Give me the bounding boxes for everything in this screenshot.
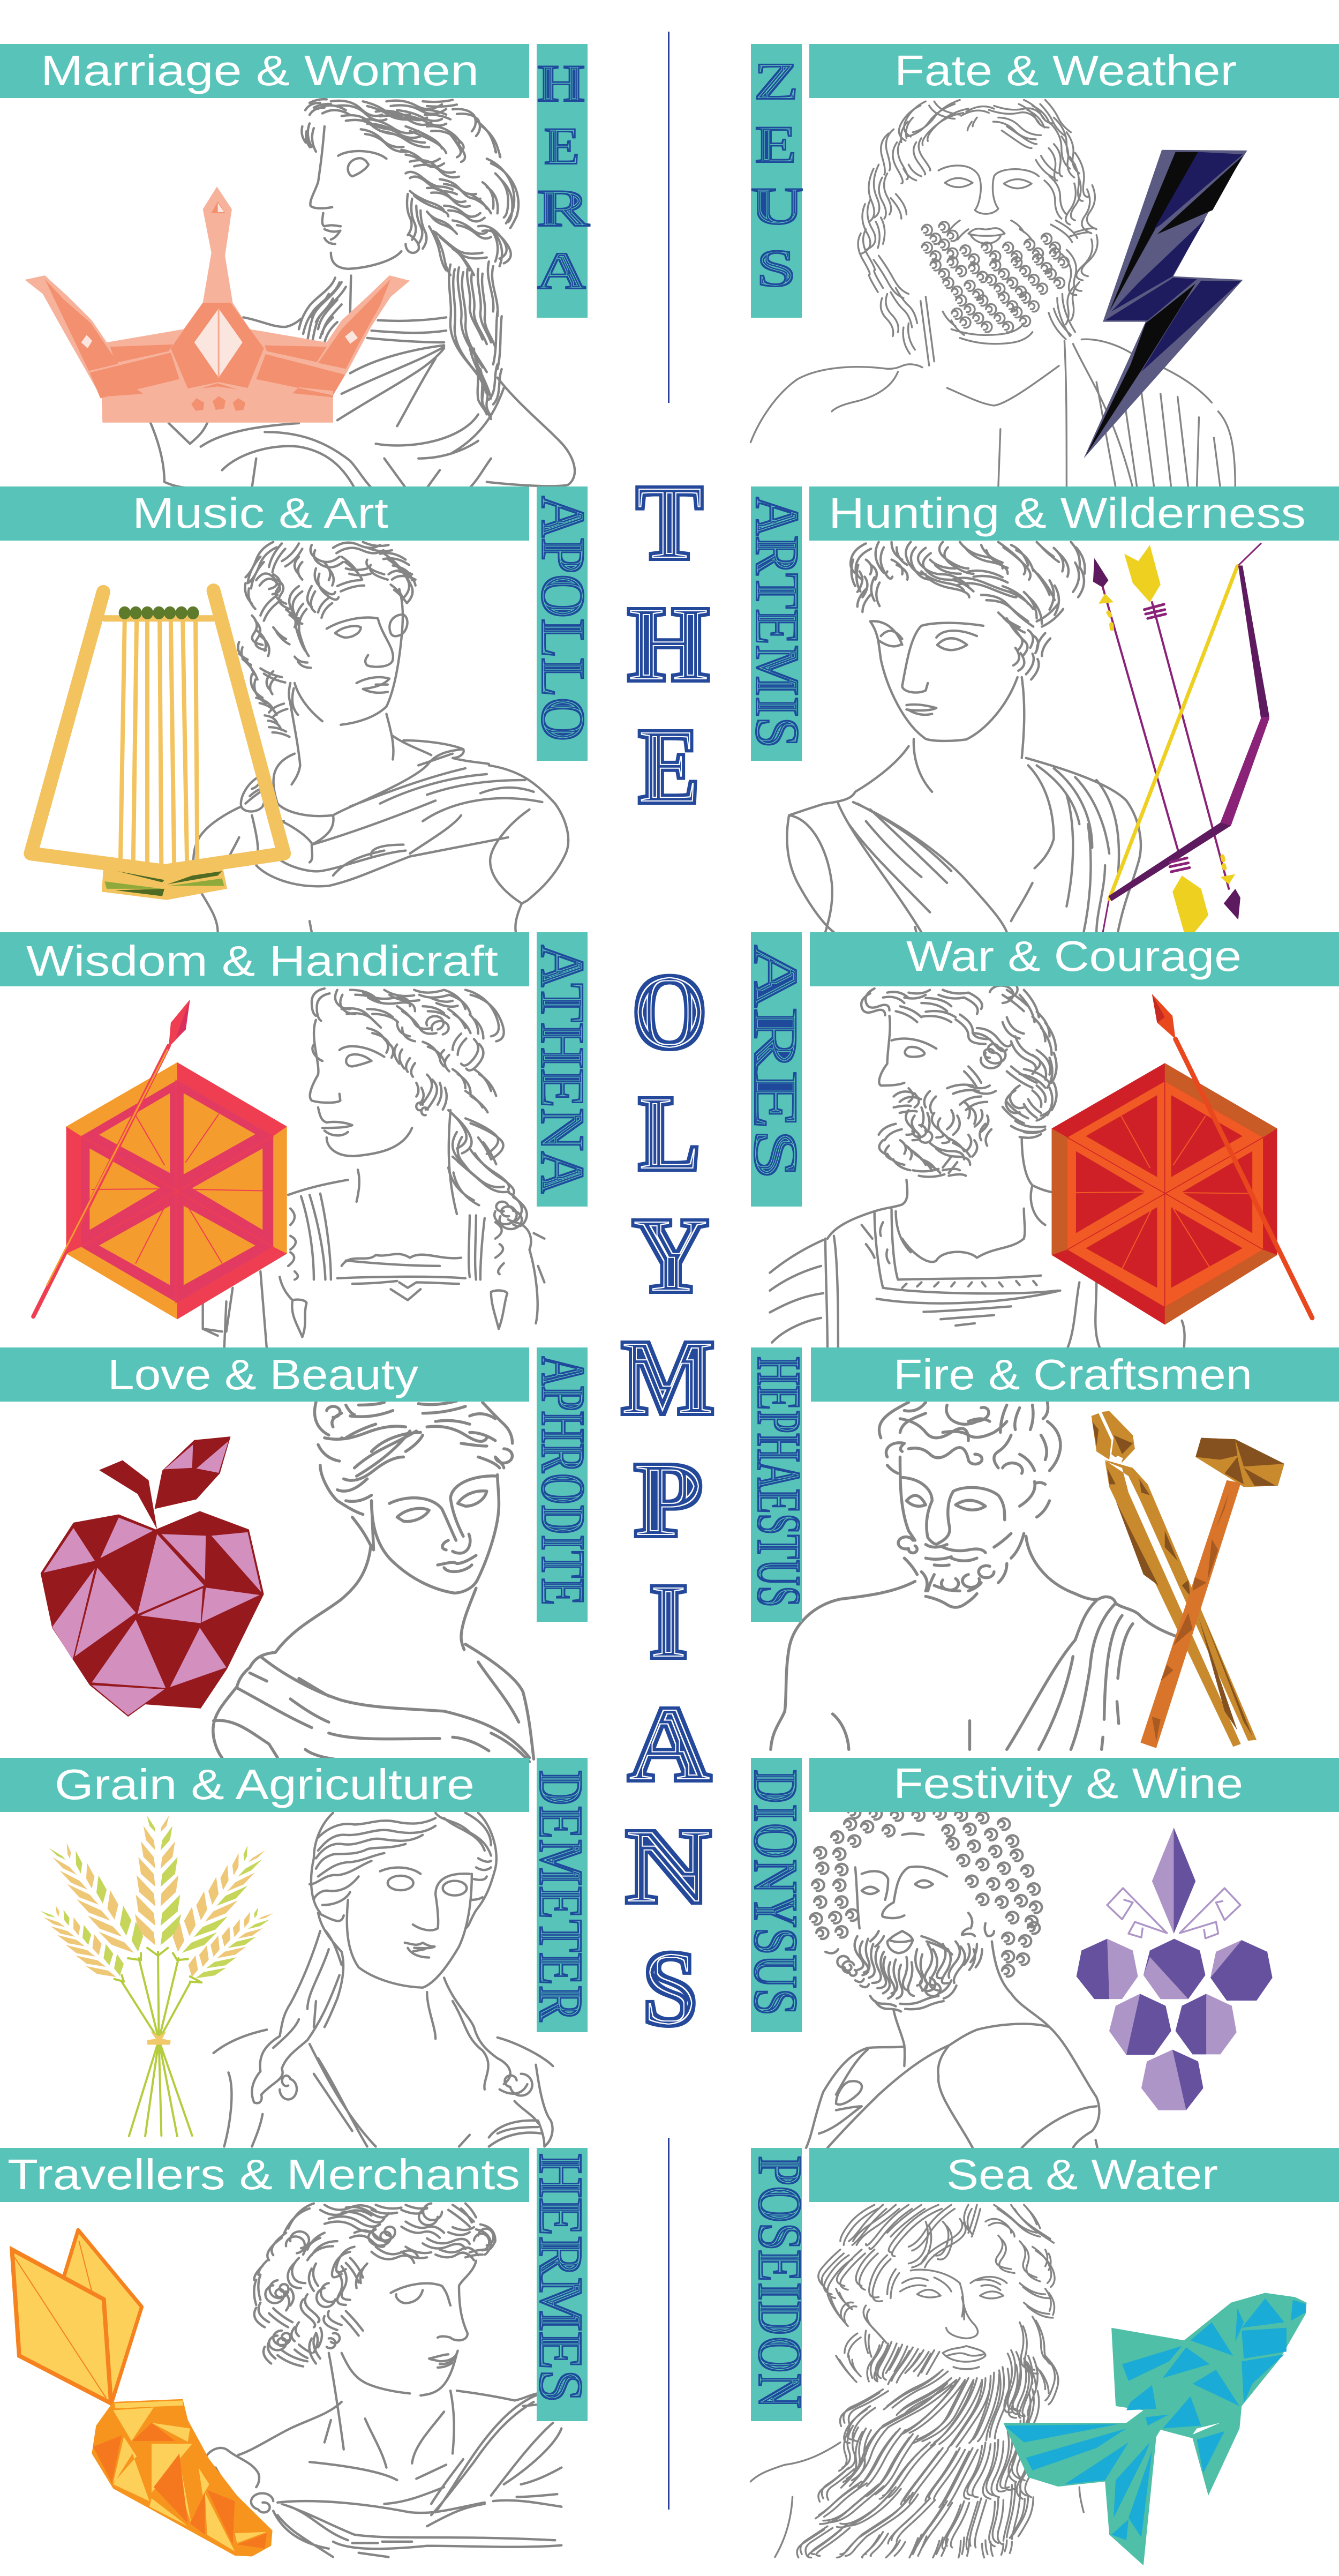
icon: winged sandal xyxy=(12,2229,273,2557)
Poseidon shoulders xyxy=(750,2443,1084,2557)
name: APHRODITE: APHRODITE xyxy=(528,1356,598,1606)
name box: Demeter xyxy=(537,1758,588,2032)
name: POSEIDON: POSEIDON xyxy=(745,2156,815,2408)
icon: wheat sheaf xyxy=(32,1815,281,2136)
icon: tongs and hammer xyxy=(1092,1411,1284,1748)
Athena hair xyxy=(312,989,527,1229)
name: ZEUS: Z xyxy=(754,51,799,111)
name box: Hermes xyxy=(537,2148,588,2421)
Artemis hair xyxy=(851,542,1085,679)
topic text: Fire & Craftsmen xyxy=(893,1351,1252,1398)
panel: Poseidon xyxy=(745,2148,1339,2565)
Apollo face xyxy=(295,589,408,725)
name box: Hera xyxy=(537,44,588,318)
Poseidon beard xyxy=(797,2342,1039,2558)
panel: Demeter xyxy=(0,1758,596,2146)
title: THE OLYMPIANS: Y xyxy=(632,1196,709,1315)
Artemis dress xyxy=(787,677,1141,932)
Hera face xyxy=(310,126,419,269)
bust: Hephaestus xyxy=(771,1402,1176,1749)
topic bar: War & Courage xyxy=(810,932,1339,986)
Dionysus torso xyxy=(806,1942,1099,2148)
bust: Aphrodite xyxy=(213,1401,533,1762)
topic bar: Wisdom & Handicraft xyxy=(0,932,529,986)
title: THE OLYMPIANS: N xyxy=(626,1807,711,1926)
topic bar: Fate & Weather xyxy=(809,44,1339,98)
name box: Hephaestus xyxy=(751,1347,802,1622)
topic bar: Music & Art xyxy=(0,486,529,541)
topic bar: Travellers & Merchants xyxy=(0,2148,529,2202)
Aphrodite hair xyxy=(314,1401,513,1550)
line: top divider xyxy=(668,32,670,403)
topic bar: Festivity & Wine xyxy=(809,1758,1339,1812)
name: HERA: R xyxy=(537,178,590,238)
Athena face xyxy=(310,1020,412,1156)
panel: Apollo xyxy=(0,486,598,932)
Ares hair xyxy=(861,980,1057,1138)
panel: Hera xyxy=(0,44,590,488)
name: DIONYSUS: DIONYSUS xyxy=(741,1770,811,2015)
Hephaestus face xyxy=(900,1457,1005,1544)
icon: lyre xyxy=(31,590,284,900)
bust: Hermes xyxy=(205,2204,561,2557)
title: THE OLYMPIANS: E xyxy=(638,707,699,826)
title: THE OLYMPIANS: M xyxy=(621,1319,714,1437)
name box: Athena xyxy=(537,932,588,1207)
title: THE OLYMPIANS: O xyxy=(632,953,707,1071)
icon: lightning bolt xyxy=(1084,150,1247,459)
icon: shield and spear xyxy=(33,999,287,1319)
topic text: Wisdom & Handicraft xyxy=(26,937,498,985)
title: THE OLYMPIANS: P xyxy=(634,1441,703,1559)
icon: grapes xyxy=(1077,1828,1273,2110)
icon: crown xyxy=(25,186,410,423)
Hera hair xyxy=(299,99,518,419)
title: THE OLYMPIANS: L xyxy=(638,1074,700,1193)
Hephaestus hair xyxy=(879,1402,1060,1517)
Hermes face xyxy=(342,2261,476,2395)
topic text: Travellers & Merchants xyxy=(7,2151,520,2198)
name: ZEUS: U xyxy=(750,176,804,236)
Dionysus beard xyxy=(837,1931,982,2011)
panel: Ares xyxy=(741,932,1339,1350)
name: HERA xyxy=(537,54,590,301)
title: THE OLYMPIANS: I xyxy=(649,1562,688,1681)
topic text: Grain & Agriculture xyxy=(55,1761,475,1808)
Zeus face xyxy=(938,166,1039,244)
panel: Aphrodite xyxy=(0,1347,598,1762)
name: HERA: H xyxy=(537,54,585,113)
name: ZEUS xyxy=(750,51,804,298)
panel: Hermes xyxy=(0,2148,596,2557)
bust: Zeus xyxy=(750,100,1235,488)
Aphrodite body xyxy=(213,1547,533,1762)
name: ZEUS: E xyxy=(755,115,797,174)
name: ZEUS: S xyxy=(757,238,795,298)
title: THE OLYMPIANS: A xyxy=(628,1685,711,1803)
title: THE OLYMPIANS: T xyxy=(636,463,703,582)
icon: bow and arrows xyxy=(1093,543,1269,932)
name box: Ares xyxy=(751,932,802,1207)
Demeter locks and dress xyxy=(214,1913,553,2146)
topic text: War & Courage xyxy=(906,932,1242,980)
bust: Demeter xyxy=(214,1813,553,2146)
icon: fish xyxy=(1003,2293,1306,2565)
panel: Zeus xyxy=(750,44,1339,488)
Zeus hair xyxy=(858,100,1097,365)
name: HERMES: HERMES xyxy=(526,2153,596,2402)
name: ARTEMIS: ARTEMIS xyxy=(742,497,813,747)
Apollo hair xyxy=(238,542,416,737)
Zeus torso xyxy=(750,339,1235,488)
name box: Artemis xyxy=(751,486,802,761)
name: ATHENA: ATHENA xyxy=(528,945,598,1194)
topic text: Marriage & Women xyxy=(41,47,479,94)
Hera drapery xyxy=(149,275,575,488)
panel: Dionysus xyxy=(741,1758,1339,2148)
name box: Apollo xyxy=(537,486,588,761)
icon: apple xyxy=(41,1436,264,1717)
title: THE OLYMPIANS xyxy=(621,463,714,2048)
Zeus beard xyxy=(922,220,1069,344)
panel: Artemis xyxy=(742,486,1339,932)
Demeter face xyxy=(347,1868,472,1988)
topic text: Festivity & Wine xyxy=(893,1759,1243,1807)
bust: Apollo xyxy=(193,542,568,932)
Athena dress xyxy=(203,1110,544,1350)
Hermes body xyxy=(205,2353,561,2557)
Ares tunic xyxy=(770,1137,1185,1350)
name box: Dionysus xyxy=(751,1758,802,2032)
panel: Hephaestus xyxy=(744,1347,1339,1749)
Hephaestus beard xyxy=(898,1533,1024,1607)
topic text: Sea & Water xyxy=(946,2151,1218,2198)
name: DEMETER: DEMETER xyxy=(526,1770,596,2022)
topic bar: Marriage & Women xyxy=(0,44,529,98)
Dionysus face xyxy=(855,1867,947,1953)
Ares beard xyxy=(879,1084,996,1177)
bust: Athena xyxy=(203,989,544,1350)
bust: Hera xyxy=(149,99,575,488)
Ares face xyxy=(879,1016,936,1085)
topic bar: Grain & Agriculture xyxy=(0,1758,529,1812)
Poseidon hair xyxy=(818,2205,1058,2405)
name: HERA: E xyxy=(544,116,580,176)
name: HEPHAESTUS: HEPHAESTUS xyxy=(744,1357,814,1607)
Hephaestus body xyxy=(771,1536,1176,1749)
Hermes hair xyxy=(254,2204,495,2367)
topic bar: Fire & Craftsmen xyxy=(811,1347,1339,1402)
name: APOLLO: APOLLO xyxy=(528,496,598,742)
name: HERA: A xyxy=(537,241,586,301)
Poseidon face xyxy=(900,2270,1007,2369)
topic bar: Sea & Water xyxy=(809,2148,1339,2202)
Artemis face xyxy=(870,621,1018,741)
bust: Dionysus xyxy=(806,1807,1099,2148)
topic text: Love & Beauty xyxy=(108,1351,418,1398)
Apollo drapery xyxy=(193,703,568,932)
bust: Ares xyxy=(770,980,1185,1350)
title: THE OLYMPIANS: S xyxy=(643,1929,697,2048)
panel: Athena xyxy=(0,932,598,1350)
icon: shield and spear xyxy=(1051,994,1312,1325)
topic text: Fate & Weather xyxy=(894,47,1237,94)
name: ARES: ARES xyxy=(741,945,811,1179)
Demeter hair xyxy=(310,1813,497,1928)
bust: Artemis xyxy=(787,542,1141,932)
title: THE OLYMPIANS: H xyxy=(628,585,709,703)
topic text: Music & Art xyxy=(132,489,388,537)
name box: Zeus xyxy=(751,44,802,318)
name box: Aphrodite xyxy=(537,1347,588,1622)
name box: Poseidon xyxy=(751,2148,802,2421)
topic bar: Love & Beauty xyxy=(0,1347,529,1402)
Aphrodite face xyxy=(372,1475,499,1593)
line: bottom divider xyxy=(668,2138,670,2510)
topic bar: Hunting & Wilderness xyxy=(809,486,1339,541)
bust: Poseidon xyxy=(750,2205,1084,2558)
Dionysus curls xyxy=(810,1807,1042,1976)
topic text: Hunting & Wilderness xyxy=(829,489,1306,537)
